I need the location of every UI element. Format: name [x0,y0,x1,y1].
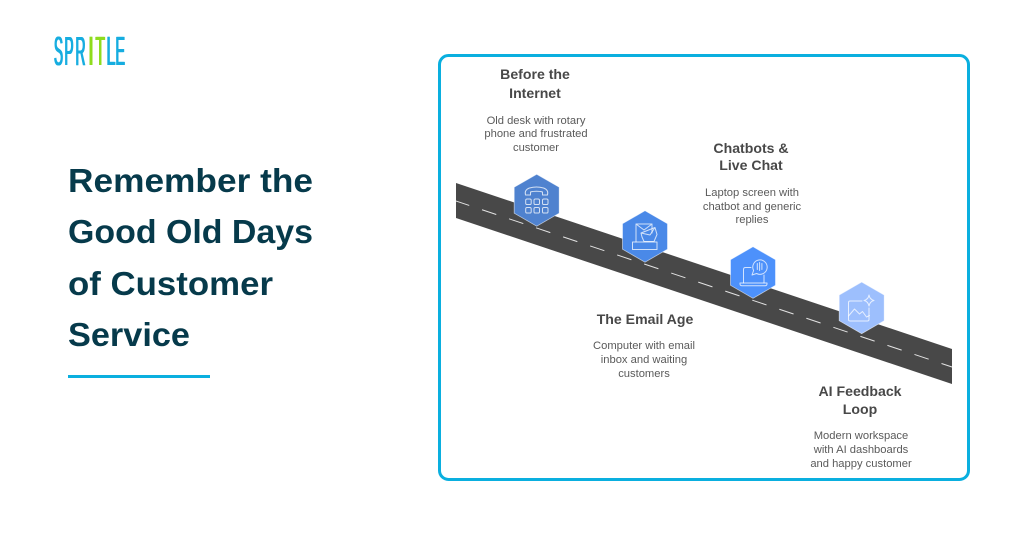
heading [68,163,313,354]
milestone: Before the Internet: Internet [509,85,561,101]
logo: Spritle: T [95,28,104,74]
milestone: AI Feedback Loop [810,282,912,470]
heading underline [68,375,210,378]
heading: Service [68,317,190,354]
icon: AI image sparkle hexagon [839,282,884,334]
text: E [115,28,124,74]
milestone: AI Feedback Loop: and happy customer [810,458,912,470]
milestone: Chatbots and Live Chat: Laptop screen with [705,187,799,199]
panel: customer service timeline [440,56,968,480]
logo: Spritle: P [64,28,73,74]
milestone: AI Feedback Loop: with AI dashboards [813,444,909,456]
milestone: The Email Age [593,211,695,380]
heading: Good Old Days [68,214,313,251]
milestone: Chatbots and Live Chat: Live Chat [719,157,783,173]
icon: laptop chatbot hexagon [730,247,776,298]
milestone: The Email Age: inbox and waiting [601,354,687,366]
milestone: The Email Age: Computer with email [593,340,695,352]
milestone: Chatbots and Live Chat: chatbot and generic [703,201,802,213]
milestone: AI Feedback Loop: Loop [843,401,878,417]
logo: Spritle: I [88,28,94,74]
heading: of Customer [68,266,273,303]
milestone: The Email Age: The Email Age [597,311,693,327]
milestone: Before the Internet: phone and frustrated [484,128,588,140]
milestone: Chatbots and Live Chat [703,140,802,298]
milestone: AI Feedback Loop: Modern workspace [814,430,908,442]
icon: email inbox hexagon [622,211,668,262]
milestone: Before the Internet: Before the [500,66,570,82]
logo: Spritle: L [106,28,115,74]
milestone: Before the Internet: Old desk with rotary [487,115,586,127]
milestone: The Email Age: customers [618,368,670,380]
logo: Spritle [54,28,124,74]
milestone: Before the Internet [484,66,588,226]
logo: Spritle: S [54,28,62,74]
road [455,183,952,384]
logo: Spritle: R [75,28,85,74]
milestone: Chatbots and Live Chat: Chatbots & [713,140,789,156]
icon: rotary phone hexagon [514,174,559,226]
heading: Remember the [68,163,313,200]
milestone: Chatbots and Live Chat: replies [736,214,769,226]
milestone: AI Feedback Loop: AI Feedback [818,383,902,399]
milestone: Before the Internet: customer [513,142,559,154]
